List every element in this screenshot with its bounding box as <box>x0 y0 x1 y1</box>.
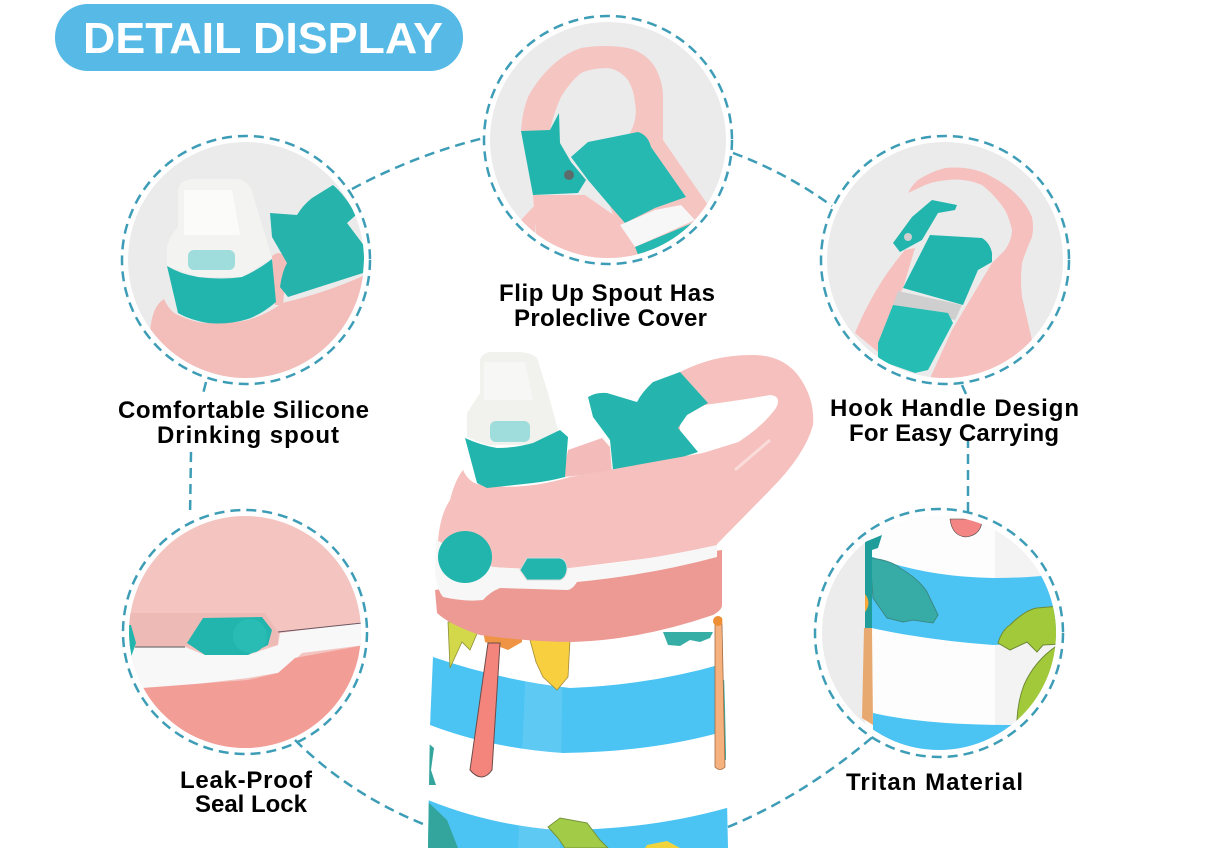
label: seal lock <box>180 767 313 818</box>
left teal accents <box>428 743 436 785</box>
teal trunk strip <box>865 535 882 628</box>
salmon collar <box>435 550 722 642</box>
connector lines between detail circles <box>190 138 968 827</box>
salmon collar <box>144 646 360 748</box>
left palm leaves <box>448 622 482 668</box>
teal bottom cover <box>878 305 953 373</box>
bottle body with stripes <box>425 610 735 848</box>
title badge <box>55 4 463 71</box>
label: tritan material: Tritan Material <box>846 769 1023 796</box>
label: flip up spout: Flip Up Spout Has <box>499 280 715 307</box>
coral palm crown <box>484 636 522 650</box>
label: flip up spout <box>499 280 715 332</box>
lime leaf <box>548 818 608 848</box>
teal flip cap <box>270 185 365 297</box>
detail circle: silicone spout <box>122 136 380 390</box>
pink back wall <box>563 438 612 477</box>
white seal band <box>435 540 717 601</box>
detail circle: tritan material <box>815 505 1065 770</box>
teal cover <box>571 132 686 223</box>
teal leaves right <box>663 632 713 646</box>
handle highlight <box>735 440 770 470</box>
front of lid <box>438 440 770 569</box>
teal palm leaf <box>870 558 938 623</box>
label: seal lock: Seal Lock <box>195 791 308 818</box>
teal flip cap <box>588 372 708 470</box>
teal top cover <box>903 235 992 305</box>
blue stripes <box>867 556 1060 645</box>
right trunk <box>722 680 726 760</box>
bottle surface <box>865 516 995 730</box>
lime palm leaves <box>1017 645 1060 720</box>
teal slider <box>187 617 272 655</box>
main bottle <box>425 352 813 848</box>
pink handle <box>521 46 708 260</box>
label: flip up spout: Proleclive Cover <box>514 305 707 332</box>
pink lower body <box>521 195 638 258</box>
clear spout <box>167 179 272 277</box>
title badge: DETAIL DISPLAY <box>83 14 443 63</box>
yellow leaf <box>645 841 680 848</box>
coral ellipse <box>950 519 982 537</box>
lower teal <box>635 223 692 254</box>
teal collar <box>465 430 568 488</box>
label: hook handle: For Easy Carrying <box>849 420 1059 447</box>
detail circle: flip up spout <box>484 16 732 264</box>
yellow palm leaves <box>530 640 570 690</box>
teal collar <box>167 259 276 324</box>
teal latch <box>893 200 957 252</box>
hinge screw <box>564 170 574 180</box>
orange fruit <box>865 594 868 612</box>
teal slider <box>520 558 567 580</box>
label: hook handle <box>830 395 1079 447</box>
coral trunk <box>470 643 500 777</box>
label: silicone spout: Drinking spout <box>157 422 339 449</box>
clear spout <box>467 352 558 445</box>
teal round button <box>438 531 492 583</box>
pink left body <box>855 248 915 352</box>
white band <box>125 622 365 690</box>
hook handle ring <box>640 355 813 543</box>
orange trunk <box>862 628 873 725</box>
detail circle: hook handle <box>821 136 1069 400</box>
grey strip <box>893 291 962 320</box>
label: seal lock: Leak-Proof <box>180 767 313 794</box>
pink hook <box>908 168 1033 378</box>
white strip <box>620 205 695 247</box>
teal button edge <box>129 625 136 656</box>
label: hook handle: Hook Handle Design <box>830 395 1079 422</box>
darker recess <box>125 613 278 646</box>
label: silicone spout: Comfortable Silicone <box>118 397 369 424</box>
teal hinge <box>521 113 586 195</box>
pink lid <box>150 276 363 378</box>
detail circle: seal lock <box>123 510 367 760</box>
label: silicone spout <box>118 397 369 449</box>
